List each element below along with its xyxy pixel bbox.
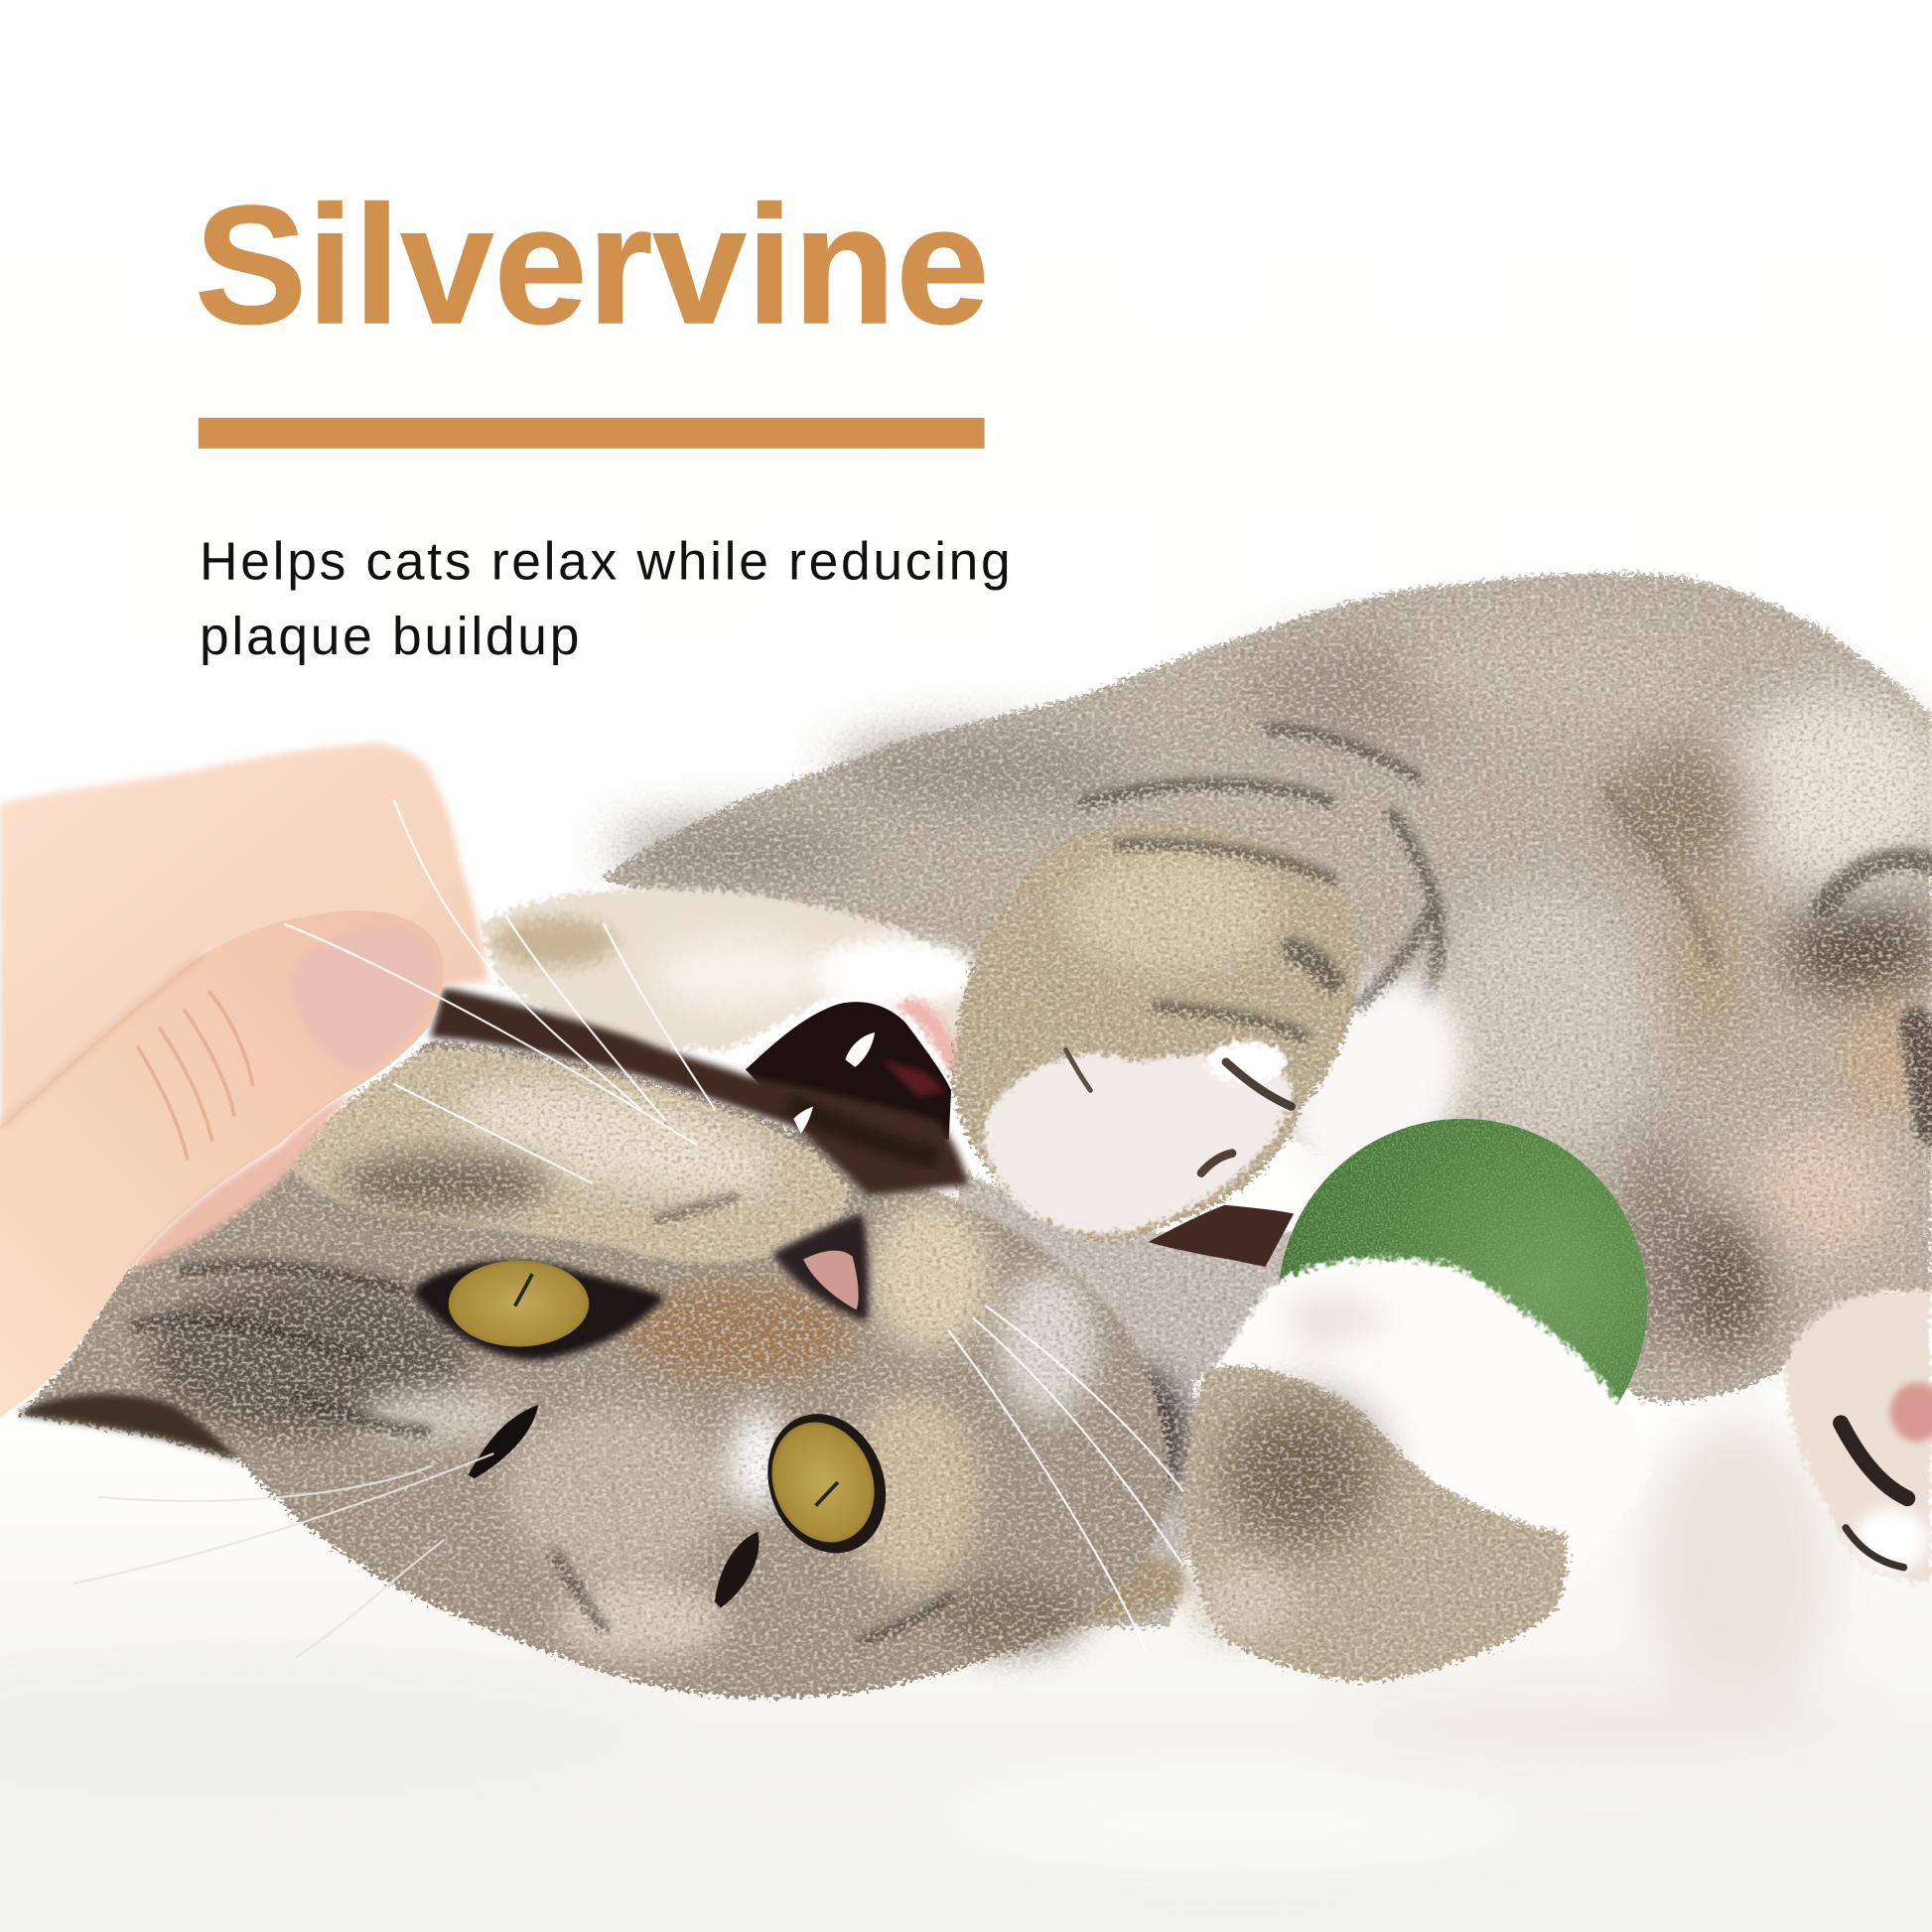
- body stripes: [1084, 727, 1932, 1128]
- cat left eye: [412, 1261, 665, 1360]
- cat arm reaching over mouth: [481, 888, 992, 1084]
- face black marks: [469, 1405, 538, 1478]
- head tonal patches: [148, 1199, 1097, 1660]
- green catnip ball: [1278, 1119, 1647, 1488]
- cat body: [602, 573, 1932, 1401]
- cat right eye: [748, 1396, 906, 1571]
- description text: plaque buildup: [200, 608, 582, 666]
- cat head: [19, 1041, 1168, 1698]
- floor tones: [0, 1417, 1872, 1867]
- upper cat paw: [952, 823, 1430, 1242]
- cat illustration: [0, 573, 1932, 1698]
- head dark markings: [136, 1264, 949, 1639]
- title underline: [199, 418, 985, 449]
- thumb: [0, 910, 444, 1417]
- cat nose: [772, 1213, 869, 1322]
- hand holding stick: [0, 743, 487, 1417]
- description text: Helps cats relax while reducing: [200, 532, 1013, 591]
- lower cat paw on ball: [1184, 1258, 1649, 1682]
- ball stick: [1149, 1205, 1294, 1267]
- thumbnail: [290, 926, 438, 1072]
- body tonal patches: [617, 617, 1932, 1355]
- white chest bib: [1250, 946, 1498, 1222]
- white toes: [984, 1041, 1294, 1233]
- grey fur behind whiskers: [936, 1171, 1294, 1626]
- cat muzzle upper: [285, 1047, 848, 1263]
- ear: [19, 1394, 240, 1461]
- knuckle creases: [138, 992, 252, 1159]
- crease between finger and thumb: [0, 955, 203, 1126]
- whiskers: [73, 801, 1182, 1657]
- cat open mouth with fang: [746, 1002, 951, 1140]
- index finger: [0, 743, 487, 1126]
- right cat paw: [1784, 1291, 1932, 1582]
- silvervine stick in mouth: [430, 987, 968, 1195]
- lower finger: [127, 1092, 354, 1272]
- title: Silvervine: [195, 171, 989, 358]
